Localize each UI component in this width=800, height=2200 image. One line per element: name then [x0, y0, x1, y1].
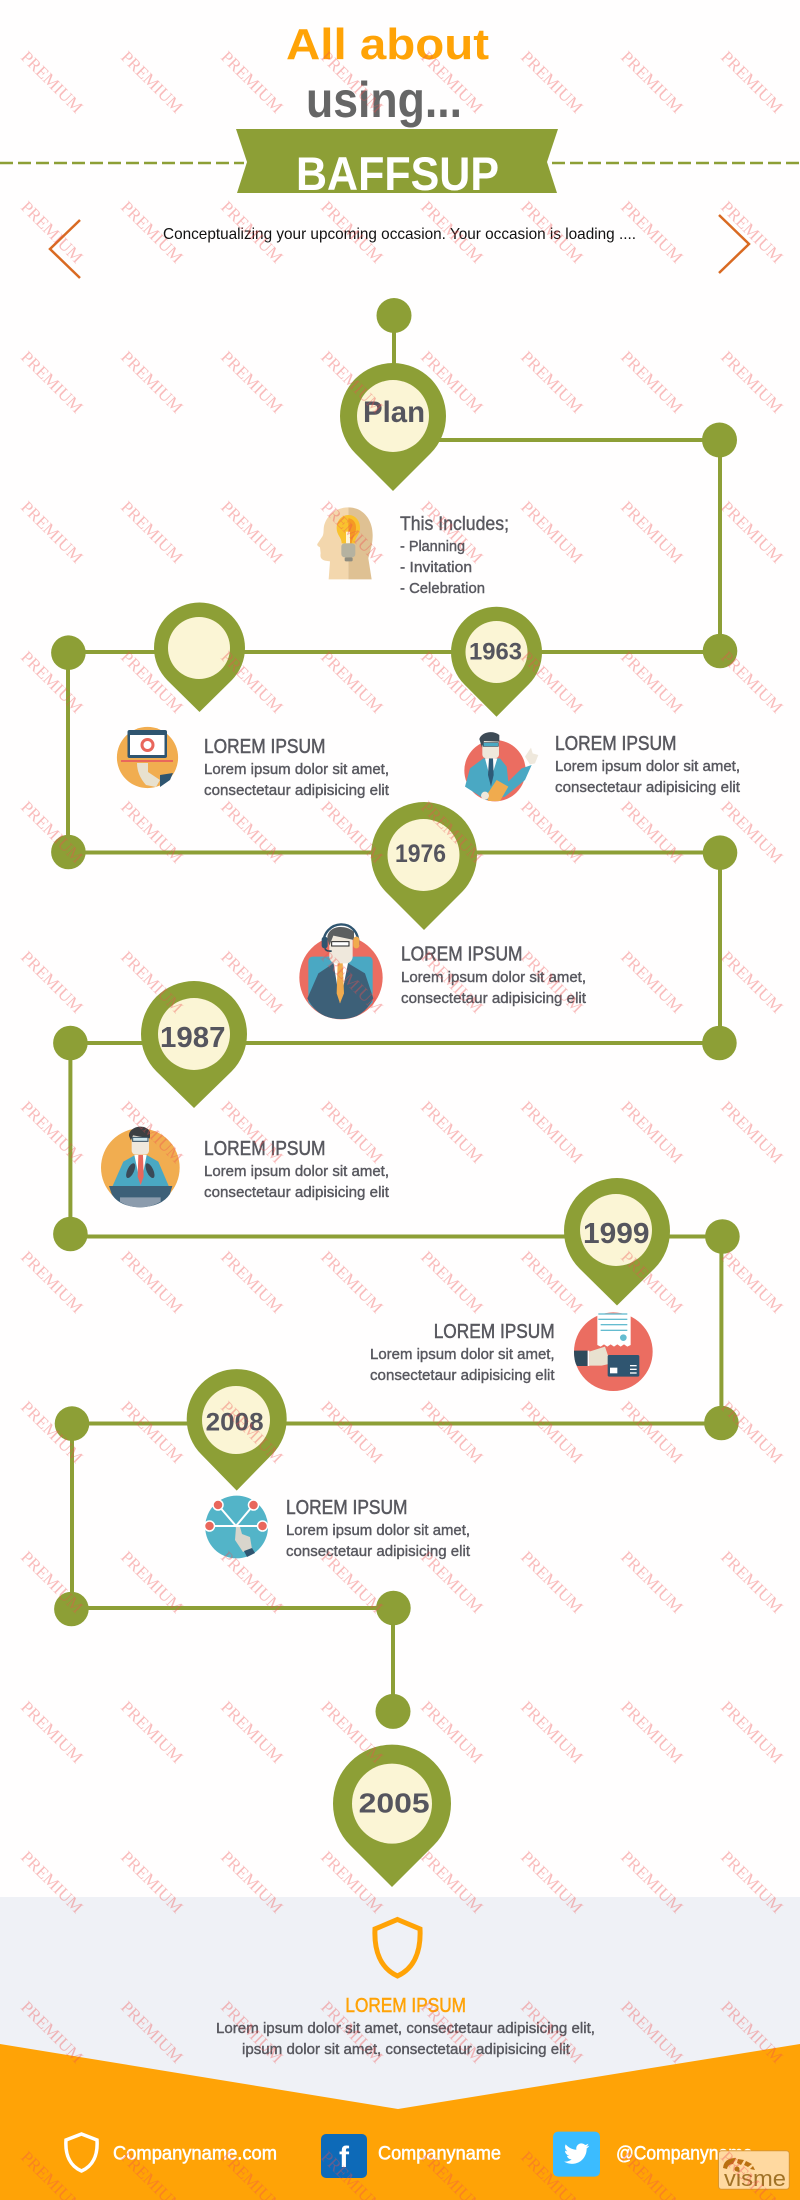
pin: Plan — [340, 363, 446, 491]
watermark pattern: PREMIUM — [117, 47, 187, 117]
icon: network touch — [204, 1496, 268, 1558]
watermark pattern: PREMIUM — [217, 497, 287, 567]
text: closing — [216, 1995, 595, 2058]
watermark pattern: PREMIUM — [717, 1697, 787, 1767]
watermark pattern: PREMIUM — [17, 1097, 87, 1167]
watermark pattern: PREMIUM — [617, 1247, 687, 1317]
watermark pattern: PREMIUM — [17, 347, 87, 417]
watermark pattern: PREMIUM — [317, 1397, 387, 1467]
watermark pattern: PREMIUM — [17, 797, 87, 867]
watermark pattern: PREMIUM — [717, 647, 787, 717]
pin: 2008 — [187, 1369, 287, 1491]
watermark pattern: PREMIUM — [517, 1697, 587, 1767]
text: item 5 — [370, 1321, 555, 1384]
watermark pattern: PREMIUM — [317, 1097, 387, 1167]
watermark pattern: PREMIUM — [417, 1247, 487, 1317]
watermark pattern: PREMIUM — [417, 947, 487, 1017]
watermark pattern: PREMIUM — [617, 797, 687, 867]
pin: blank — [154, 603, 245, 712]
text: item 6: LOREM IPSUM — [286, 1497, 408, 1519]
watermark pattern: PREMIUM — [117, 1997, 187, 2067]
panel: footer — [0, 2044, 800, 2200]
title: using... — [306, 72, 462, 128]
watermark pattern: PREMIUM — [617, 647, 687, 717]
watermark pattern: PREMIUM — [317, 1847, 387, 1917]
watermark pattern: PREMIUM — [517, 1097, 587, 1167]
dashed header rule — [0, 162, 800, 164]
watermark pattern: PREMIUM — [217, 1097, 287, 1167]
watermark pattern: PREMIUM — [217, 647, 287, 717]
footer: website — [66, 2134, 277, 2171]
watermark pattern: PREMIUM — [117, 197, 187, 267]
watermark pattern: PREMIUM — [717, 797, 787, 867]
text: item 3 — [401, 944, 587, 1007]
watermark pattern: PREMIUM — [17, 1547, 87, 1617]
watermark pattern: PREMIUM — [617, 947, 687, 1017]
watermark pattern: PREMIUM — [617, 197, 687, 267]
text: item 2: Lorem ipsum dolor sit amet, — [555, 758, 740, 775]
watermark pattern: PREMIUM — [17, 1397, 87, 1467]
watermark pattern: PREMIUM — [517, 1847, 587, 1917]
watermark pattern: PREMIUM — [717, 1997, 787, 2067]
text: item 1: LOREM IPSUM — [204, 736, 326, 758]
timeline nodes — [51, 298, 740, 1729]
text: closing: LOREM IPSUM — [345, 1995, 466, 2017]
watermark pattern: PREMIUM — [217, 1247, 287, 1317]
watermark pattern: PREMIUM — [417, 47, 487, 117]
watermark pattern: PREMIUM — [317, 947, 387, 1017]
panel: closing band — [0, 1897, 800, 2200]
pin: 1976 — [371, 802, 477, 930]
footer: website: Companyname.com — [113, 2144, 277, 2164]
watermark pattern: PREMIUM — [317, 797, 387, 867]
text: closing: ipsum dolor sit amet, consectetaur adipisicing elit — [242, 2041, 571, 2058]
watermark pattern: PREMIUM — [417, 1697, 487, 1767]
watermark pattern: PREMIUM — [417, 1547, 487, 1617]
watermark pattern: PREMIUM — [317, 647, 387, 717]
watermark pattern: PREMIUM — [217, 347, 287, 417]
watermark pattern: PREMIUM — [117, 647, 187, 717]
watermark pattern: PREMIUM — [17, 647, 87, 717]
watermark pattern: PREMIUM — [717, 347, 787, 417]
icon: receipt and credit card — [574, 1312, 653, 1391]
watermark pattern: PREMIUM — [417, 1397, 487, 1467]
watermark pattern: PREMIUM — [117, 1697, 187, 1767]
icon: orange shield — [375, 1920, 420, 1976]
pin: 1999 — [564, 1178, 670, 1306]
text: this includes: This Includes; — [400, 514, 509, 535]
watermark pattern: PREMIUM — [717, 1847, 787, 1917]
footer: facebook: Companyname — [378, 2144, 501, 2164]
watermark pattern: PREMIUM — [617, 347, 687, 417]
banner: BAFFSUP: BAFFSUP — [296, 147, 499, 200]
text: this includes — [400, 514, 509, 597]
footer: facebook — [321, 2134, 501, 2178]
text: item 1: consectetaur adipisicing elit — [204, 782, 390, 799]
text: item 6: consectetaur adipisicing elit — [286, 1543, 471, 1560]
watermark pattern: PREMIUM — [217, 1547, 287, 1617]
text: item 2 — [555, 733, 741, 796]
pin: 1987: 1987 — [160, 1022, 226, 1054]
subtitle: Conceptualizing your upcoming occasion. Your occasion is loading .... — [163, 226, 636, 243]
watermark pattern: PREMIUM — [717, 497, 787, 567]
text: this includes: - Planning — [400, 538, 465, 555]
watermark pattern: PREMIUM — [17, 1847, 87, 1917]
pin: 2008: 2008 — [206, 1408, 264, 1436]
pin: Plan: Plan — [363, 396, 425, 429]
watermark pattern: PREMIUM — [217, 1397, 287, 1467]
watermark pattern: PREMIUM — [717, 1247, 787, 1317]
watermark pattern: PREMIUM — [17, 1697, 87, 1767]
text: item 4: consectetaur adipisicing elit — [204, 1184, 390, 1201]
text: item 2: LOREM IPSUM — [555, 733, 676, 755]
text: item 1: Lorem ipsum dolor sit amet, — [204, 761, 389, 778]
text: item 5: LOREM IPSUM — [434, 1321, 555, 1343]
watermark pattern: PREMIUM — [117, 1397, 187, 1467]
text: item 2: consectetaur adipisicing elit — [555, 779, 741, 796]
watermark pattern: PREMIUM — [517, 1247, 587, 1317]
watermark pattern: PREMIUM — [517, 797, 587, 867]
title: All about — [286, 20, 489, 69]
timeline connector path — [68, 315, 721, 1711]
watermark pattern: PREMIUM — [217, 1697, 287, 1767]
pin: 1987 — [141, 981, 247, 1108]
watermark pattern: PREMIUM — [117, 347, 187, 417]
watermark pattern: PREMIUM — [17, 947, 87, 1017]
icon: head with light bulb — [317, 507, 373, 579]
watermark pattern: PREMIUM — [717, 47, 787, 117]
pin: 1999: 1999 — [583, 1218, 650, 1250]
watermark pattern: PREMIUM — [617, 1847, 687, 1917]
watermark pattern: PREMIUM — [517, 47, 587, 117]
text: item 6 — [286, 1497, 471, 1560]
badge: visme: visme — [724, 2166, 786, 2191]
watermark pattern: PREMIUM — [417, 647, 487, 717]
text: item 4 — [204, 1138, 390, 1201]
text: item 3: Lorem ipsum dolor sit amet, — [401, 969, 586, 986]
watermark pattern: PREMIUM — [17, 1247, 87, 1317]
icon: call agent — [299, 924, 383, 1019]
watermark pattern: PREMIUM — [517, 647, 587, 717]
watermark pattern: PREMIUM — [717, 947, 787, 1017]
watermark pattern: PREMIUM — [317, 497, 387, 567]
text: item 6: Lorem ipsum dolor sit amet, — [286, 1522, 470, 1539]
watermark pattern: PREMIUM — [617, 1097, 687, 1167]
pin: 2005: 2005 — [359, 1787, 430, 1818]
badge: visme — [718, 2151, 789, 2191]
footer: twitter: @Companyname — [616, 2144, 753, 2164]
watermark pattern: PREMIUM — [517, 1397, 587, 1467]
text: item 4: LOREM IPSUM — [204, 1138, 326, 1160]
pin: 2005 — [333, 1745, 451, 1887]
watermark pattern: PREMIUM — [317, 1997, 387, 2067]
watermark pattern: PREMIUM — [217, 797, 287, 867]
banner: BAFFSUP — [236, 129, 558, 200]
watermark pattern: PREMIUM — [617, 1397, 687, 1467]
watermark pattern: PREMIUM — [417, 1097, 487, 1167]
pin: 1976: 1976 — [395, 840, 446, 868]
footer: facebook: f — [339, 2141, 350, 2174]
text: closing: Lorem ipsum dolor sit amet, consectetaur adipisicing elit, — [216, 2020, 595, 2037]
watermark pattern: PREMIUM — [617, 497, 687, 567]
text: item 3: consectetaur adipisicing elit — [401, 990, 587, 1007]
title — [286, 20, 489, 128]
watermark pattern: PREMIUM — [517, 347, 587, 417]
pin: 1963 — [451, 607, 542, 717]
watermark pattern: PREMIUM — [217, 1997, 287, 2067]
watermark pattern: PREMIUM — [17, 47, 87, 117]
icon: browser settings on hand — [117, 727, 178, 788]
watermark pattern: PREMIUM — [117, 1847, 187, 1917]
text: this includes: - Invitation — [400, 559, 472, 576]
watermark pattern: PREMIUM — [217, 1847, 287, 1917]
watermark pattern: PREMIUM — [617, 1547, 687, 1617]
text: item 5: Lorem ipsum dolor sit amet, — [370, 1346, 555, 1363]
watermark pattern: PREMIUM — [117, 1247, 187, 1317]
watermark pattern: PREMIUM — [417, 347, 487, 417]
watermark pattern: PREMIUM — [17, 1997, 87, 2067]
text: item 3: LOREM IPSUM — [401, 944, 522, 966]
watermark pattern: PREMIUM — [517, 1547, 587, 1617]
text: item 5: consectetaur adipisicing elit — [370, 1367, 555, 1384]
arrow: next — [719, 215, 749, 273]
watermark pattern: PREMIUM — [317, 1547, 387, 1617]
watermark pattern: PREMIUM — [717, 1097, 787, 1167]
watermark pattern: PREMIUM — [417, 197, 487, 267]
watermark pattern: PREMIUM — [517, 1997, 587, 2067]
text: item 4: Lorem ipsum dolor sit amet, — [204, 1163, 389, 1180]
watermark pattern: PREMIUM — [17, 197, 87, 267]
icon: speaker at podium — [101, 1127, 180, 1207]
watermark pattern: PREMIUM — [217, 947, 287, 1017]
watermark pattern: PREMIUM — [417, 1847, 487, 1917]
watermark pattern: PREMIUM — [117, 1097, 187, 1167]
watermark pattern: PREMIUM — [517, 947, 587, 1017]
watermark pattern: PREMIUM — [317, 1697, 387, 1767]
watermark pattern: PREMIUM — [717, 197, 787, 267]
watermark pattern: PREMIUM — [717, 1397, 787, 1467]
footer: twitter — [553, 2132, 753, 2177]
text: item 1 — [204, 736, 390, 799]
arrow: previous — [50, 220, 80, 278]
watermark pattern: PREMIUM — [117, 947, 187, 1017]
watermark pattern: PREMIUM — [617, 47, 687, 117]
watermark pattern: PREMIUM — [217, 197, 287, 267]
watermark pattern: PREMIUM — [117, 797, 187, 867]
watermark pattern: PREMIUM — [117, 1547, 187, 1617]
watermark pattern: PREMIUM — [217, 47, 287, 117]
watermark pattern: PREMIUM — [317, 47, 387, 117]
pin: 1963: 1963 — [469, 638, 522, 666]
watermark pattern: PREMIUM — [417, 1997, 487, 2067]
watermark pattern: PREMIUM — [17, 497, 87, 567]
watermark pattern: PREMIUM — [617, 1697, 687, 1767]
watermark pattern: PREMIUM — [717, 1547, 787, 1617]
watermark pattern: PREMIUM — [117, 497, 187, 567]
watermark pattern: PREMIUM — [317, 347, 387, 417]
icon: man with folder — [464, 732, 538, 801]
watermark pattern: PREMIUM — [417, 797, 487, 867]
text: this includes: - Celebration — [400, 580, 485, 597]
watermark pattern: PREMIUM — [317, 1247, 387, 1317]
watermark pattern: PREMIUM — [617, 1997, 687, 2067]
watermark pattern: PREMIUM — [417, 497, 487, 567]
watermark pattern: PREMIUM — [317, 197, 387, 267]
watermark pattern: PREMIUM — [517, 497, 587, 567]
watermark pattern: PREMIUM — [517, 197, 587, 267]
